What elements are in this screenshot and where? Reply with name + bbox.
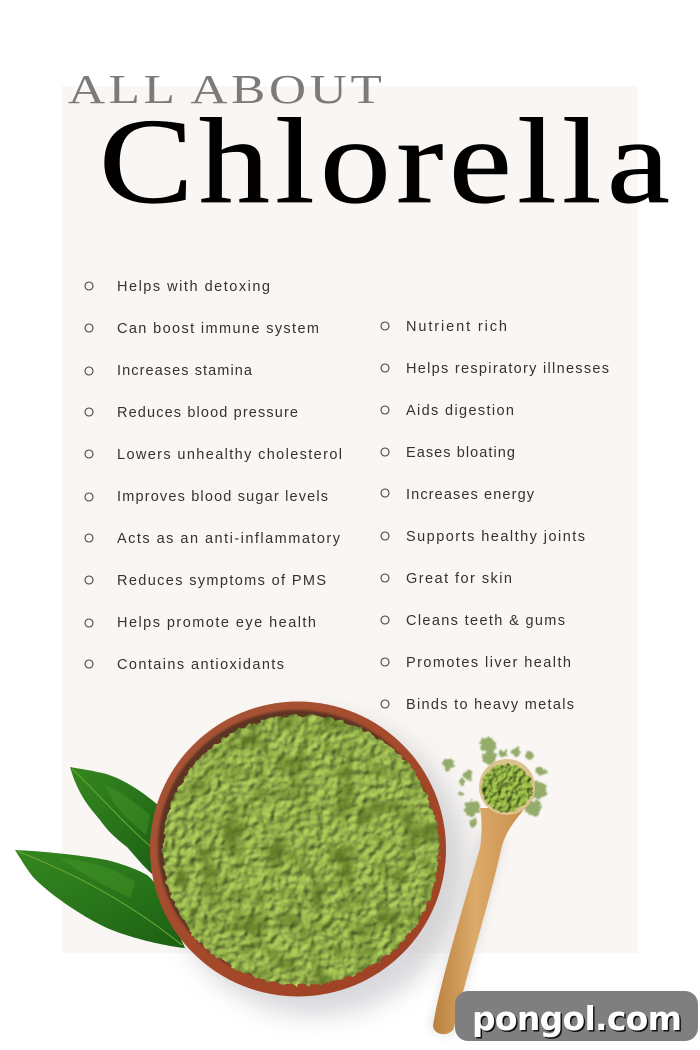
item: joints: Supports healthy joints: [406, 529, 585, 545]
item: liver health: Promotes liver health: [406, 655, 571, 671]
watermark: pongol.com: [472, 999, 682, 1038]
watermark: [455, 991, 698, 1041]
item: PMS: Reduces symptoms of PMS: [117, 573, 326, 589]
item: stamina: Increases stamina: [117, 363, 253, 379]
item: anti-inflammatory: Acts as an anti-inflammatory: [117, 531, 341, 547]
spoon powder: [482, 764, 532, 812]
item: eye health: Helps promote eye health: [117, 615, 316, 631]
item: blood sugar: Improves blood sugar levels: [117, 489, 328, 505]
benefits list: right column: [381, 319, 609, 713]
item: antioxidants: Contains antioxidants: [117, 657, 284, 673]
background panel: [62, 86, 638, 953]
bowl rim: [150, 702, 446, 996]
icon: lower leaf: [15, 850, 185, 948]
benefits list: left column: [85, 279, 342, 673]
spoon handle: [433, 808, 525, 1034]
item: detoxing: Helps with detoxing: [117, 279, 270, 295]
scattered powder: [442, 737, 547, 826]
item: respiratory: Helps respiratory illnesses: [406, 361, 609, 377]
item: digestion: Aids digestion: [406, 403, 514, 419]
item: bloating: Eases bloating: [406, 445, 515, 461]
item: energy: Increases energy: [406, 487, 535, 503]
spoon bowl: [479, 759, 535, 815]
bowl inner shadow: [158, 710, 436, 982]
spoon with powder: [433, 737, 547, 1034]
watermark: pongol.com: [474, 1000, 684, 1040]
title: Chlorella: Chlorella: [99, 93, 670, 229]
item: cholesterol: Lowers unhealthy cholesterol: [117, 447, 342, 463]
item: blood pressure: Reduces blood pressure: [117, 405, 298, 421]
item: immune system: Can boost immune system: [117, 321, 319, 337]
heading: all about: ALL ABOUT: [68, 68, 382, 113]
bowl with green powder: [150, 702, 446, 996]
bowl and spoon cast shadow: [166, 716, 505, 1036]
item: heavy metals: Binds to heavy metals: [406, 697, 574, 713]
item: skin: Great for skin: [406, 571, 512, 587]
item: nutrient rich: Nutrient rich: [406, 319, 507, 335]
icon: upper leaf: [70, 767, 158, 874]
green powder: [163, 715, 439, 985]
item: teeth and gums: Cleans teeth & gums: [406, 613, 565, 629]
